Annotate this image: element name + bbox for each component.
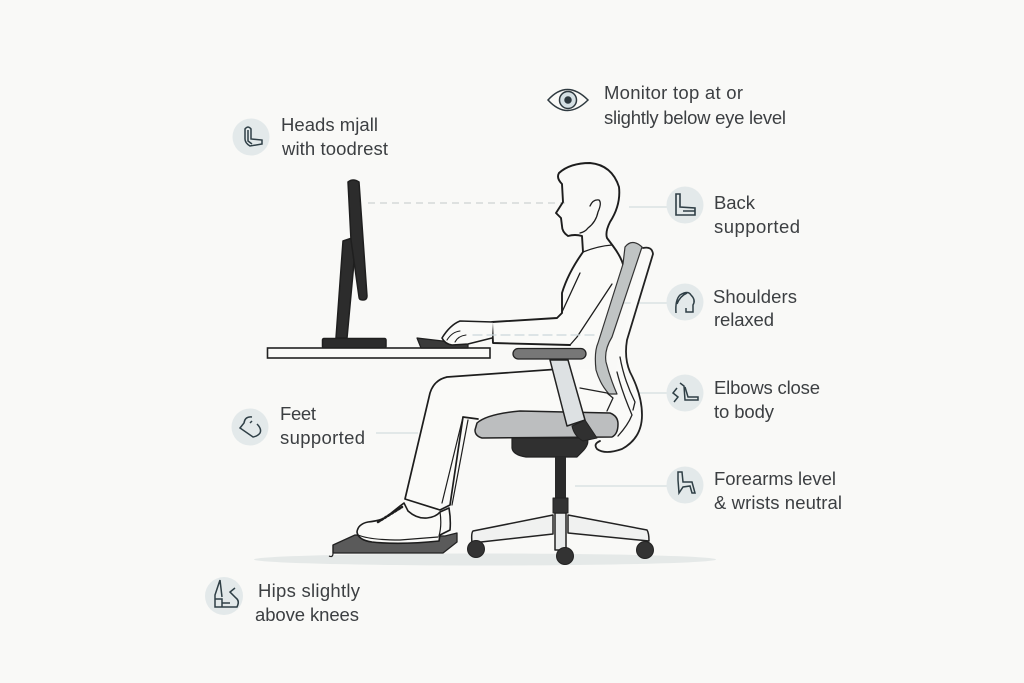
hand <box>442 321 493 345</box>
chair arm <box>513 348 597 441</box>
collar <box>583 245 612 252</box>
label: Back <box>714 192 756 213</box>
callout: back <box>666 186 800 237</box>
label: to body <box>714 401 775 422</box>
label: with toodrest <box>281 138 388 159</box>
icon: forearms <box>666 466 704 504</box>
label: Forearms level <box>714 468 836 489</box>
label: Heads mjall <box>281 114 378 135</box>
label: supported <box>280 427 365 448</box>
lumbar curve <box>580 388 613 411</box>
floor shadow <box>254 554 716 566</box>
label <box>714 192 800 237</box>
base arms <box>472 515 649 543</box>
chair back frame <box>596 248 653 452</box>
label: supported <box>714 216 800 237</box>
backrest cushion <box>595 242 642 394</box>
person details <box>442 200 612 345</box>
ear <box>580 200 600 233</box>
label: Monitor top at or <box>604 82 743 103</box>
icon: elbows <box>666 374 704 412</box>
forearm guide <box>473 334 597 336</box>
label: above knees <box>255 604 359 625</box>
leader lines <box>376 207 667 486</box>
arm crease <box>562 273 612 345</box>
person torso and head outline <box>492 163 624 345</box>
fingers <box>447 331 466 342</box>
wheels <box>468 540 654 564</box>
armrest <box>513 348 586 359</box>
label: Hips slightly <box>258 580 361 601</box>
chair <box>468 163 654 564</box>
person torso fill <box>493 246 624 345</box>
label: Shoulders <box>713 286 797 307</box>
trouser fold <box>442 417 468 505</box>
label: slightly below eye level <box>604 107 786 128</box>
icon: shoulders <box>666 284 704 320</box>
arm post <box>550 360 585 426</box>
icon: hips <box>205 577 243 615</box>
inner back frame <box>617 357 635 436</box>
callout: hips <box>205 577 361 625</box>
arm bracket <box>572 420 597 441</box>
label <box>255 580 361 625</box>
eye level dashed line <box>368 202 565 204</box>
seat cushion <box>475 411 618 438</box>
footrest <box>329 533 457 557</box>
person legs <box>405 369 600 510</box>
callout: feet <box>232 403 365 448</box>
label <box>280 403 365 448</box>
callout: shoulders <box>666 284 797 330</box>
desk <box>268 348 490 358</box>
label <box>713 286 797 330</box>
label: relaxed <box>714 309 774 330</box>
seat mechanism <box>512 438 588 457</box>
callout: footrest <box>232 114 388 159</box>
icon: feet <box>232 408 268 446</box>
label <box>604 82 786 128</box>
icon: back <box>666 186 704 224</box>
label <box>281 114 388 159</box>
label <box>714 468 842 513</box>
callout: elbows <box>666 374 820 422</box>
cylinder sleeve <box>555 513 566 550</box>
cylinder collar <box>553 498 568 513</box>
keyboard <box>417 338 468 348</box>
icon: chair l-shape <box>232 118 270 156</box>
monitor <box>322 180 386 348</box>
label: Elbows close <box>714 377 820 398</box>
label: & wrists neutral <box>714 492 842 513</box>
callout: monitor eye level <box>548 82 786 128</box>
shoe <box>357 503 450 543</box>
icon: eye <box>548 90 588 110</box>
label <box>714 377 820 422</box>
label: Feet <box>280 403 316 424</box>
callout: forearms <box>666 466 842 513</box>
gas cylinder <box>555 457 566 498</box>
